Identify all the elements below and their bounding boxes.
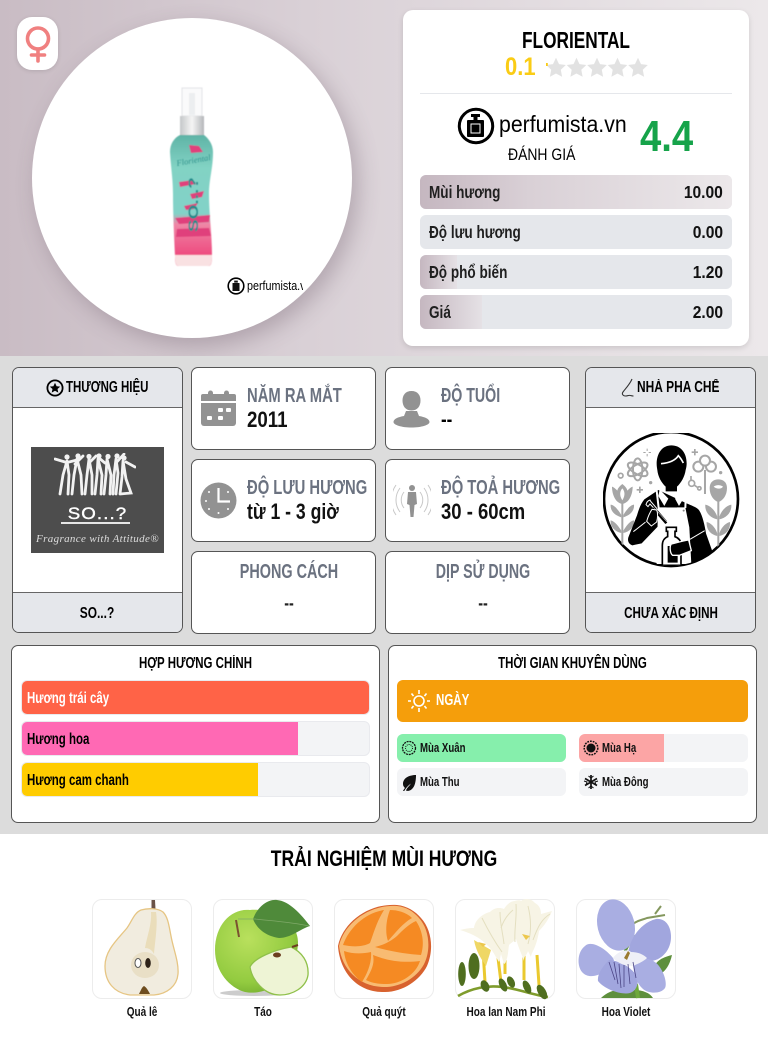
right hand [670,539,691,555]
caption: apple: Táo [254,1004,272,1019]
overall score: 4.4 [640,112,693,161]
accord: floral [21,721,370,756]
icon: sun [408,690,430,712]
score bar: longevity: Độ lưu hương [429,222,521,242]
gender badge [17,17,58,70]
note: apple [213,899,313,999]
label: ĐỘ TUỔI [441,385,500,407]
left arm highlight [633,522,646,532]
left flower [610,483,634,544]
icon: nose [622,378,634,396]
pipette [645,499,668,523]
season: spring [397,734,566,762]
figure [628,445,712,562]
season: autumn: Mùa Thu [420,775,460,789]
value: 30 - 60cm [441,499,525,524]
molecule and sparkles [618,473,700,489]
perfume image circle [32,18,352,338]
note: mandarin [334,899,434,999]
caption: mandarin: Quả quýt [362,1004,406,1019]
perfumista logo [458,108,627,144]
scent experience heading: TRẢI NGHIỆM MÙI HƯƠNG [271,846,497,871]
card: occasion [385,551,570,634]
divider [420,93,732,94]
accord: citrus: Hương cam chanh [27,772,129,789]
season: summer [579,734,748,762]
star rating [546,58,648,76]
card: longevity [191,459,376,542]
perfume bottle: Floriental [175,152,212,168]
season: spring: Mùa Xuân [420,741,465,755]
label: NĂM RA MẮT [247,385,342,407]
season: winter: Mùa Đông [602,775,649,789]
brand logo: Fragrance with Attitude® [36,533,159,545]
collar [658,490,682,506]
brand logo [31,447,164,553]
note: violet [576,899,676,999]
label: DỊP SỬ DỤNG [436,561,530,583]
cotton flower [693,455,715,471]
perfumista logo: perfumista.vn [499,111,627,137]
value: -- [284,593,294,613]
note: freesia [455,899,555,999]
user score: 0.1 [505,53,536,81]
value: -- [478,593,488,613]
perfumer card [585,367,756,633]
perfumer name: CHƯA XÁC ĐỊNH [624,605,718,622]
score bar: scent: 10.00 [684,182,723,202]
value: -- [441,409,452,431]
accords heading: HỢP HƯƠNG CHÍNH [139,655,252,672]
score bar: popularity [420,255,732,289]
brand logo: SO...? [68,504,127,523]
card: projection [385,459,570,542]
perfumer heading: NHÀ PHA CHẾ [637,379,719,396]
card: age [385,367,570,450]
score bar: popularity: Độ phổ biến [429,262,507,282]
brand card [12,367,183,633]
apron [656,507,691,563]
perfume name: FLORIENTAL [522,27,630,53]
label: ĐỘ TOẢ HƯƠNG [441,477,560,499]
bottle [662,527,680,565]
score bar: scent: Mùi hương [429,182,500,202]
icon: person [394,391,430,428]
perfume bottle: SO...? [185,177,201,232]
caption: pear: Quả lê [127,1004,157,1019]
accord: citrus [21,762,370,797]
time heading: THỜI GIAN KHUYÊN DÙNG [498,655,647,672]
icon: star badge [46,380,64,396]
right rose [705,479,731,551]
icon: person radiating [393,484,431,517]
panel: main accords [11,645,380,823]
score bar: longevity [420,215,732,249]
rating card [403,10,749,346]
note: pear [92,899,192,999]
score bar: price: 2.00 [693,302,723,322]
value: từ 1 - 3 giờ [247,499,339,524]
score bar: price [420,295,732,329]
icon: female symbol [26,26,50,63]
score bar: price: Giá [429,302,451,322]
atom [625,458,649,480]
caption: freesia: Hoa lan Nam Phi [466,1004,545,1019]
card: release year [191,367,376,450]
top hero panel [0,0,768,356]
watermark logo [227,277,303,295]
accord: fruity: Hương trái cây [27,690,109,707]
accord: floral: Hương hoa [27,731,89,748]
icon: clock [200,482,236,518]
season: autumn [397,768,566,796]
season: summer: Mùa Hạ [602,741,636,755]
caption: violet: Hoa Violet [602,1004,650,1019]
day bar [397,680,748,722]
label: ĐỘ LƯU HƯƠNG [247,477,367,499]
label: PHONG CÁCH [240,561,338,583]
panel: recommended time [388,645,757,823]
season: winter [579,768,748,796]
perfume bottle [169,87,214,266]
day label: NGÀY [436,692,469,709]
card: style [191,551,376,634]
perfumer illustration [603,433,740,568]
accord: fruity [21,680,370,715]
details panel [0,356,768,834]
icon: calendar [201,390,236,426]
brand name: SO...? [80,605,114,622]
score bar: longevity: 0.00 [693,222,723,242]
value: 2011 [247,407,288,432]
score bar: popularity: 1.20 [693,262,723,282]
review label: ĐÁNH GIÁ [508,145,575,164]
brand heading: THƯƠNG HIỆU [66,379,148,396]
score bar: scent [420,175,732,209]
